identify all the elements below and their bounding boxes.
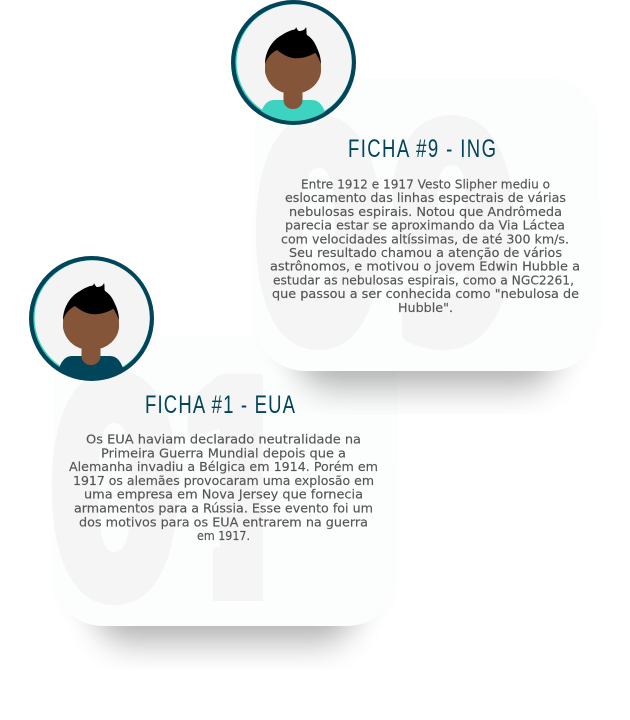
text block: ficha 1: Os EUA haviam declarado neutralidade na: [86, 432, 361, 446]
heading: ficha 9: FICHA #9 - ING: [348, 134, 496, 163]
text block: ficha 9: astrônomos, e motivou o jovem Edwin Hubble a: [270, 259, 580, 274]
big number 09: [252, 69, 521, 406]
text block: ficha 1: uma empresa em Nova Jersey que fornecia: [84, 487, 363, 502]
text block: ficha 9: [270, 176, 580, 315]
text block: ficha 1: dos motivos para os EUA entrarem na guerra: [79, 514, 368, 529]
icon: avatar ficha 1: [29, 256, 154, 386]
text block: ficha 1: Primeira Guerra Mundial depois que a: [101, 445, 346, 460]
text block: ficha 9: Seu resultado chamou a atenção de vários: [289, 245, 562, 260]
text block: ficha 1: Alemanha invadiu a Bélgica em 1914. Porém em: [69, 459, 378, 474]
text block: ficha 9: que passou a ser conhecida como "nebulosa de: [272, 286, 579, 301]
big number 01: 0: [48, 324, 181, 661]
heading: ficha 1: FICHA #1 - EUA: [145, 390, 295, 419]
text block: ficha 1: [69, 432, 378, 543]
text block: ficha 9: Hubble".: [398, 300, 453, 315]
card: ficha 9: [255, 78, 599, 371]
big number 01: [52, 371, 263, 605]
text block: ficha 9: com velocidades altíssimas, de até 300 km/s.: [281, 231, 569, 246]
text block: ficha 1: 1917 os alemães provocaram uma explosão em: [73, 473, 374, 488]
text block: ficha 9: nebulosas espirais. Notou que Andrômeda: [289, 204, 562, 219]
text block: ficha 9: eslocamento das linhas espectrais de várias: [285, 190, 566, 205]
big number 09: 0: [252, 69, 385, 406]
card: ficha 1: [53, 335, 397, 626]
text block: ficha 1: armamentos para a Rússia. Esse evento foi um: [74, 500, 373, 516]
text block: ficha 9: Entre 1912 e 1917 Vesto Slipher mediu o: [301, 176, 550, 192]
icon: avatar ficha 9: [231, 0, 356, 130]
text block: ficha 9: parecia estar se aproximando da Via Láctea: [285, 218, 565, 233]
big number 01: 1: [171, 324, 304, 661]
panel: ficha 9: [252, 69, 599, 406]
text block: ficha 1: em 1917.: [197, 528, 250, 543]
panel: ficha 1: [52, 371, 377, 662]
big number 09: 9: [388, 69, 521, 406]
text block: ficha 9: estudar as nebulosas espirais, como a NGC2261,: [273, 272, 574, 287]
